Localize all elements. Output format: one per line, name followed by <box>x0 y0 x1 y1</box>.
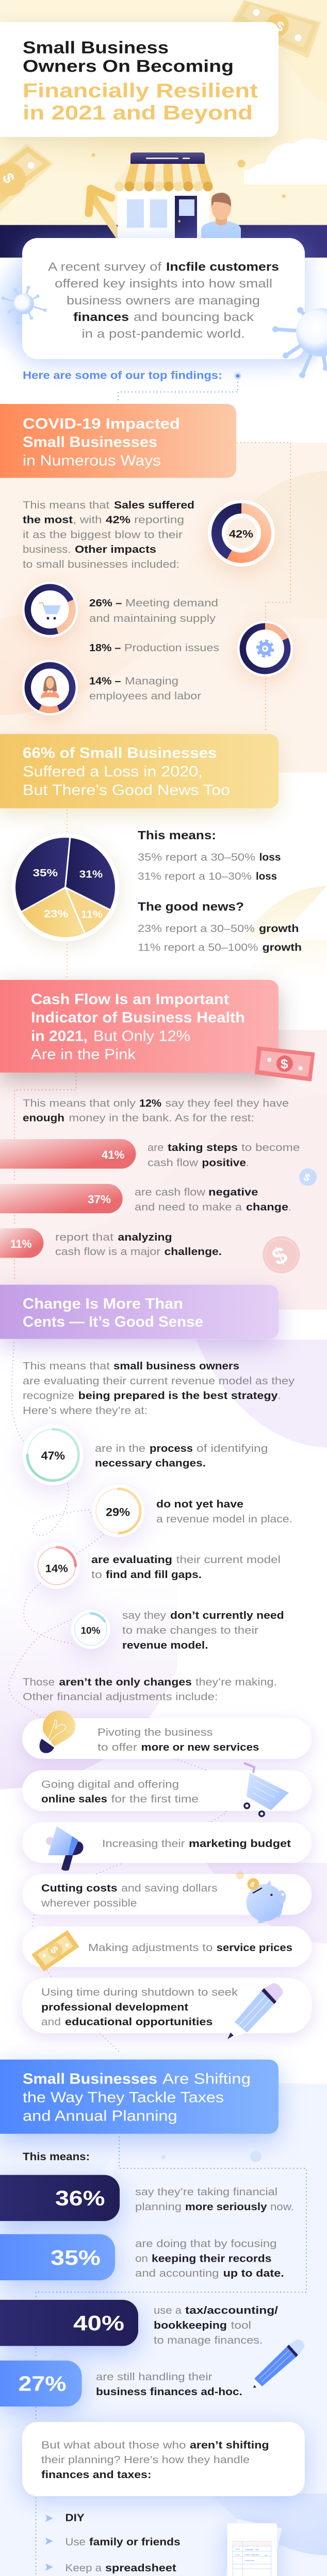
text block: sales suffered: Other impacts <box>75 544 156 555</box>
pill text <box>102 1838 291 1850</box>
text: 29% no revenue model <box>156 1498 292 1525</box>
background blobs: purple <box>0 1340 327 1943</box>
icon: blue coin <box>299 1168 317 1186</box>
pill: going digital <box>22 1763 312 1816</box>
text block: other adjustments: Those <box>23 1676 55 1688</box>
icon: pencil <box>227 1983 283 2039</box>
text block: revenue model intro: Here’s where they’re at: <box>23 1405 148 1417</box>
text: 40% tool <box>154 2304 278 2346</box>
text: 29% no revenue model: do not yet have <box>156 1498 243 1510</box>
text: 41% taking steps: are <box>148 1142 164 1154</box>
text: 14% find and fill gaps <box>91 1554 281 1581</box>
intro text: A recent survey of <box>48 260 162 274</box>
text: 41% taking steps: positive <box>202 1157 246 1168</box>
text block: sales suffered: reporting <box>134 514 184 526</box>
text: 10% no change needed: say they <box>122 1609 167 1621</box>
text: 18% production issues: 18% – <box>89 642 121 654</box>
bar: 11%: 11% <box>10 1238 32 1250</box>
chart: 18% donut with gear icon <box>237 621 293 676</box>
illustration: storefront <box>115 152 212 239</box>
pill text: Making adjustments to <box>88 1942 212 1954</box>
text: 10% no change needed: don’t currently need <box>170 1609 284 1621</box>
text block: growth figures <box>138 900 302 954</box>
icon: dollar bill: $ <box>48 1944 60 1956</box>
title: Financially Resilient <box>23 80 258 102</box>
illustration: shop owner <box>201 193 241 239</box>
section heading: 66% loss: But There’s Good News Too <box>23 782 230 799</box>
section heading: taxes: Are Shifting <box>162 2071 251 2088</box>
text: 37% cash flow negative <box>135 1187 291 1213</box>
chart: 14% progress ring <box>34 1543 79 1589</box>
title: Owners On Becoming <box>23 56 234 75</box>
icon: spreadsheet document <box>224 2519 282 2576</box>
text: 11% analyzing cash flow: report that <box>55 1231 113 1243</box>
text block: sales suffered: the most <box>23 514 73 526</box>
bar: 40% <box>0 2300 138 2346</box>
text: 14% managing employees: employees and labor <box>89 690 201 702</box>
text block: sales suffered: This means that <box>23 499 109 511</box>
text: 37% cash flow negative: change <box>246 1201 288 1213</box>
section heading: cash flow: Are in the Pink <box>31 1046 136 1063</box>
text block: revenue model intro: small business owners <box>113 1360 239 1372</box>
chart: 47% progress ring <box>23 1425 84 1485</box>
text: 37% cash flow negative: . <box>288 1201 291 1213</box>
intro text: business owners are managing <box>67 294 260 307</box>
text: 36% planning: more seriously <box>185 2201 267 2213</box>
chart: 10% progress ring <box>71 1610 110 1649</box>
text block: growth figures: The good news? <box>138 900 244 913</box>
text: 40% tool: bookkeeping <box>154 2319 227 2331</box>
text: 36% planning: now. <box>270 2201 294 2213</box>
pill text <box>88 1942 292 1954</box>
text: 11% analyzing cash flow: analyzing <box>118 1231 172 1243</box>
chart: 26% donut with cart icon <box>21 580 79 639</box>
text: 26% meeting demand: 26% – <box>89 597 122 609</box>
list item: family or friends: family or friends <box>89 2536 181 2548</box>
section heading: covid-19: in Numerous Ways <box>23 453 161 469</box>
text: 35% records: are doing that by focusing <box>135 2238 276 2250</box>
pill text: online sales <box>41 1793 107 1805</box>
text: 11% analyzing cash flow <box>55 1231 222 1258</box>
card text: their planning? Here’s how they handle <box>41 2454 250 2466</box>
icon: pink coin <box>263 1236 300 1274</box>
card text <box>41 2439 269 2481</box>
title card <box>0 22 279 137</box>
text block: only 12%: 12% <box>139 1097 161 1109</box>
text block: revenue model intro: recognize <box>23 1390 74 1402</box>
pill text <box>41 1883 218 1909</box>
pill text: service prices <box>217 1942 292 1954</box>
card text: aren’t shifting <box>190 2439 269 2451</box>
icon: virus left <box>1 285 46 325</box>
text block: growth figures: growth <box>259 923 299 935</box>
text block: only 12%: money in the bank. As for the rest: <box>69 1112 254 1124</box>
text: 10% no change needed: revenue model. <box>122 1639 208 1651</box>
text: 35% records: up to date. <box>223 2267 284 2279</box>
intro text <box>48 260 279 340</box>
decorative virus glows <box>0 260 327 370</box>
section heading: taxes: and Annual Planning <box>23 2108 177 2124</box>
text block: growth figures: 11% report a 50–100% <box>138 942 258 954</box>
icon: light bulb <box>40 1710 75 1753</box>
pill text <box>41 1986 238 2028</box>
section heading: cash flow: Cash Flow Is an Important <box>31 991 229 1008</box>
chart: 10% progress ring: 10% <box>80 1625 100 1636</box>
intro text: in a post-pandemic world. <box>81 327 245 340</box>
section heading: taxes: the Way They Tackle Taxes <box>23 2090 224 2106</box>
text block: only 12%: enough <box>23 1112 64 1124</box>
icon: falling dollar bill left <box>0 143 54 211</box>
text block: sales suffered <box>23 499 194 570</box>
card text: finances and taxes: <box>41 2469 152 2481</box>
chart: 42% donut <box>206 498 277 569</box>
panel background: covid <box>0 443 327 773</box>
icon: blue coin: $ <box>301 1172 312 1184</box>
section heading: covid-19 <box>0 404 236 478</box>
text: 35% records: on <box>135 2252 148 2264</box>
pill: professional development <box>22 1978 312 2039</box>
intro text: and bouncing back <box>134 310 254 324</box>
card: those not shifting <box>22 2422 305 2496</box>
text: 40% tool: use a <box>154 2304 182 2316</box>
pill text: wherever possible <box>41 1897 137 1909</box>
icon: piggy bank <box>236 1871 286 1923</box>
title <box>23 38 258 124</box>
text block: other adjustments <box>23 1676 277 1703</box>
text block: revenue model intro: This means that <box>23 1360 110 1372</box>
illustration: upward arrow <box>87 189 125 239</box>
text: 40% tool: tool <box>231 2319 251 2331</box>
bar: 36% <box>0 2175 120 2221</box>
text: 47% process: are in the <box>95 1443 145 1454</box>
panel background: cash flow <box>0 1030 327 1310</box>
text block: sales suffered: business. <box>23 544 71 555</box>
text: 36% planning <box>135 2186 294 2213</box>
list item: spreadsheet: Keep a <box>65 2562 102 2574</box>
panel: hero background <box>0 0 327 258</box>
text block: loss figures <box>138 828 281 883</box>
intro card <box>22 238 305 359</box>
text: 47% process: necessary changes. <box>95 1457 206 1469</box>
text: 14% managing employees: Managing <box>125 675 178 687</box>
text: 14% find and fill gaps: find and fill gaps. <box>106 1569 202 1581</box>
text: 47% process: of identifying <box>197 1443 268 1454</box>
section heading: cash flow <box>0 980 279 1073</box>
decorative dots <box>161 2151 261 2162</box>
pill text: for the first time <box>111 1793 199 1805</box>
text: 14% find and fill gaps: their current model <box>176 1554 281 1566</box>
pill text: and <box>41 2016 61 2028</box>
section heading: change: Cents — It’s Good Sense <box>23 1314 203 1330</box>
text block: loss figures: 35% report a 30–50% <box>138 851 255 863</box>
findings lead-in: Here are some of our top findings: <box>23 369 222 382</box>
text: 47% process: process <box>150 1443 193 1454</box>
bar: 35% <box>0 2234 115 2280</box>
pill: pivoting <box>22 1710 312 1759</box>
icon: megaphone <box>46 1826 84 1871</box>
text block: loss figures: loss <box>259 851 281 863</box>
list: how they handle finances <box>45 2512 267 2576</box>
text: 41% taking steps: . <box>246 1157 249 1168</box>
text: 40% tool: tax/accounting/ <box>185 2304 278 2316</box>
text: 35% records: and accounting <box>135 2267 219 2279</box>
text block: growth figures: 23% report a 30–50% <box>138 923 255 935</box>
text: 27% ad-hoc: are still handling their <box>96 2371 212 2383</box>
pill: cutting costs <box>22 1871 312 1923</box>
text: 18% production issues: Production issues <box>124 642 219 654</box>
icon: pink dollar bill <box>255 1046 315 1081</box>
text block: revenue model intro: . <box>277 1390 281 1402</box>
text block: loss figures: 31% report a 10–30% <box>138 871 252 883</box>
pill text: more or new services <box>141 1741 259 1753</box>
text: 37% cash flow negative: are cash flow <box>135 1187 205 1198</box>
icon: pink coin: $ <box>268 1241 291 1270</box>
list item: spreadsheet: spreadsheet <box>105 2562 176 2574</box>
decorative coins <box>92 154 286 198</box>
pill text <box>41 1778 199 1805</box>
text: 41% taking steps: to become <box>241 1142 300 1154</box>
section heading: taxes: Small Businesses <box>23 2071 157 2088</box>
text: 10% no change needed <box>122 1609 284 1651</box>
chart: loss and growth pie <box>11 834 120 942</box>
bar: 36%: 36% <box>55 2187 105 2210</box>
section heading: cash flow: Indicator of Business Health <box>31 1010 245 1026</box>
pill: service prices <box>22 1926 312 1971</box>
list item: family or friends <box>45 2536 181 2548</box>
text block: only 12% <box>23 1097 289 1124</box>
section heading: covid-19: Small Businesses <box>23 434 157 451</box>
icon: falling dollar bill top right: $ <box>273 18 287 35</box>
list item: DIY: DIY <box>65 2512 85 2523</box>
text block: revenue model intro: are evaluating their current revenue model as they <box>23 1375 295 1387</box>
section heading: change: Change Is More Than <box>23 1296 183 1312</box>
chart: 14% donut with employee icon <box>21 658 79 717</box>
icon: shopping cart <box>244 1763 289 1816</box>
icon: virus right <box>272 307 327 378</box>
chart: 29% progress ring: 29% <box>106 1505 130 1519</box>
list item: DIY <box>45 2512 85 2523</box>
text: 36% planning: planning <box>135 2201 182 2213</box>
pill text: Pivoting the business <box>97 1726 212 1738</box>
pill text: professional development <box>41 2001 188 2013</box>
text: 11% analyzing cash flow: cash flow is a major <box>55 1246 160 1258</box>
chart: loss and growth pie: 11% <box>81 909 103 920</box>
text: 35% records: keeping their records <box>152 2252 271 2264</box>
pill text: Cutting costs <box>41 1883 118 1894</box>
text: 41% taking steps: taking steps <box>168 1142 238 1154</box>
pill text: Using time during shutdown to seek <box>41 1986 238 1998</box>
text: 11% analyzing cash flow: challenge. <box>165 1246 222 1258</box>
section heading: 66% loss: Suffered a Loss in 2020, <box>23 764 203 780</box>
bar: 35%: 35% <box>51 2246 101 2269</box>
text block: other adjustments: aren’t the only changes <box>59 1676 192 1688</box>
background blob: gold <box>242 886 327 979</box>
text block: loss figures: loss <box>256 871 277 883</box>
bar: 11% <box>0 1228 43 1258</box>
text: 14% managing employees: 14% – <box>89 675 121 687</box>
section heading: change <box>0 1285 279 1339</box>
text block: growth figures: growth <box>263 942 302 954</box>
icon: gear <box>257 641 273 656</box>
text: 26% meeting demand: Meeting demand <box>125 597 218 609</box>
text block: other adjustments: Other financial adjustments include: <box>23 1691 218 1703</box>
section heading: cash flow: in 2021, <box>31 1028 88 1045</box>
pill text: marketing budget <box>189 1838 291 1850</box>
icon: shopping cart <box>39 603 61 620</box>
card text: But what about those who <box>41 2439 186 2451</box>
icon: employee <box>41 676 59 699</box>
chart: 47% progress ring: 47% <box>41 1449 65 1462</box>
pill text: and saving dollars <box>121 1883 218 1894</box>
text block: revenue model intro: being prepared is the best strategy <box>78 1390 278 1402</box>
section heading: 66% loss: 66% of Small Businesses <box>23 745 217 761</box>
text: 26% meeting demand: and maintaining supply <box>89 613 216 624</box>
text: 10% no change needed: to make changes to their <box>122 1624 258 1636</box>
pill text: Going digital and offering <box>41 1778 179 1790</box>
section heading: cash flow: But Only 12% <box>93 1028 190 1045</box>
pill text: Increasing their <box>102 1838 185 1850</box>
icon: piggy bank: $ <box>249 1879 256 1889</box>
icon: cloud <box>244 138 327 184</box>
chart: 14% progress ring: 14% <box>45 1563 68 1574</box>
text: 37% cash flow negative: negative <box>208 1187 258 1198</box>
text: 35% records <box>135 2238 284 2279</box>
text: 41% taking steps: cash flow <box>148 1157 198 1168</box>
text block: other adjustments: they’re making. <box>195 1676 277 1688</box>
bar: 27% <box>0 2361 81 2406</box>
text: 18% production issues <box>89 642 219 654</box>
pill text: to offer <box>97 1741 137 1753</box>
label: this means: This means: <box>23 2151 90 2163</box>
chart: 29% progress ring <box>92 1485 144 1537</box>
text block: revenue model intro <box>23 1360 295 1417</box>
text: 40% tool: to manage finances. <box>154 2334 263 2346</box>
section heading: covid-19: COVID-19 Impacted <box>23 416 180 432</box>
bar: 27%: 27% <box>19 2372 67 2396</box>
icon: dollar bill <box>31 1930 79 1971</box>
intro text: offered key insights into how small <box>55 277 272 290</box>
text: 41% taking steps <box>148 1142 300 1168</box>
pill text <box>97 1726 259 1753</box>
icon: pink dollar bill: $ <box>281 1056 288 1072</box>
text block: loss figures: This means: <box>138 828 216 842</box>
text: 27% ad-hoc: business finances ad-hoc. <box>96 2386 242 2398</box>
text: 14% managing employees <box>89 675 201 702</box>
text block: sales suffered: Sales suffered <box>114 499 194 511</box>
list item: family or friends: Use <box>65 2536 86 2548</box>
section heading: 66% loss <box>0 734 279 808</box>
bar: 41% <box>0 1139 136 1168</box>
title: Small Business <box>23 38 169 57</box>
text: 29% no revenue model: a revenue model in place. <box>156 1513 292 1525</box>
chart: loss and growth pie: 23% <box>44 909 69 920</box>
text block: only 12%: say they feel they have <box>166 1097 289 1109</box>
chart: loss and growth pie: 31% <box>79 869 103 880</box>
text block: sales suffered: to small businesses included: <box>23 558 179 570</box>
text: 27% ad-hoc <box>96 2371 242 2398</box>
text block: only 12%: This means that only <box>23 1097 136 1109</box>
text: 14% find and fill gaps: to <box>91 1569 102 1581</box>
text block: sales suffered: 42% <box>106 514 130 526</box>
intro text: Incfile customers <box>166 260 279 274</box>
title: in 2021 and Beyond <box>23 102 253 124</box>
bar: 37%: 37% <box>88 1193 111 1206</box>
text: 14% find and fill gaps: are evaluating <box>91 1554 172 1566</box>
icon: target node <box>234 372 241 380</box>
text block: sales suffered: it as the biggest blow to their <box>23 529 183 541</box>
chart: 42% donut: 42% <box>229 529 253 540</box>
text: 37% cash flow negative: and need to make a <box>135 1201 242 1213</box>
text: 47% process <box>95 1443 268 1469</box>
list item: spreadsheet <box>45 2562 176 2574</box>
text block: sales suffered: , with <box>73 514 102 526</box>
icon: blue pencil <box>253 2340 304 2388</box>
pill: marketing budget <box>22 1822 312 1871</box>
icon: falling dollar bill top right <box>232 0 321 58</box>
section heading: taxes <box>0 2060 279 2134</box>
panel background: taxes <box>0 2083 327 2576</box>
intro text: finances <box>73 310 129 324</box>
bar: 37% <box>0 1184 123 1213</box>
bar: 41%: 41% <box>102 1148 124 1161</box>
bar: 40%: 40% <box>73 2311 124 2335</box>
chart: loss and growth pie: 35% <box>33 868 58 879</box>
text: 36% planning: say they’re taking financial <box>135 2186 277 2198</box>
text: 26% meeting demand <box>89 597 218 624</box>
pill text: educational opportunities <box>65 2016 212 2028</box>
